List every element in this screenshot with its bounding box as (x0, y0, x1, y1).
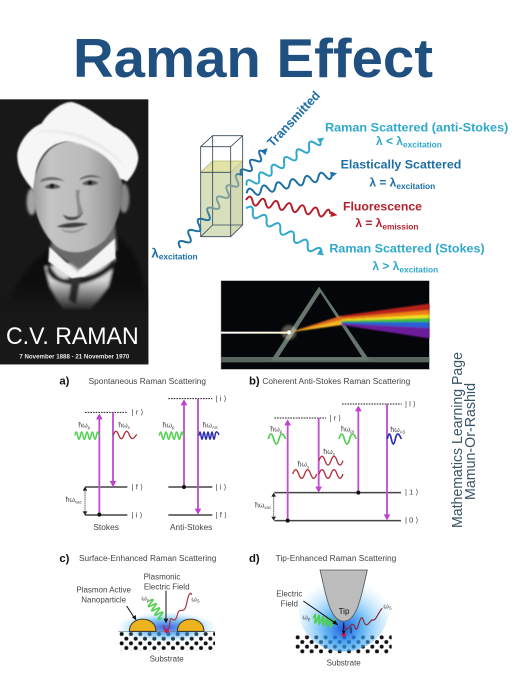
panel: prism photo (221, 281, 429, 369)
label: elastically scattered (341, 158, 461, 191)
white beam (221, 332, 289, 334)
label: anti-Stokes: excitation (403, 139, 442, 149)
anti-Stokes wave (245, 134, 326, 189)
name: C.V. RAMAN: C.V. RAMAN (6, 323, 139, 350)
labels c: Substrate (150, 654, 184, 663)
labels d: Tip (339, 607, 350, 616)
label: elastically scattered: λ = λ (369, 176, 396, 190)
labels c (76, 573, 190, 663)
panel c: surface-enhanced Raman scattering: S (197, 599, 200, 604)
incident wave (146, 599, 165, 620)
Stokes levels: | i ⟩ (132, 510, 143, 519)
Stokes levels: | r ⟩ (132, 408, 143, 417)
heading d: d) (249, 553, 260, 565)
substrate dots d (295, 635, 392, 654)
label: Stokes: Raman Scattered (Stokes) (329, 242, 485, 256)
label: transmitted: Transmitted (265, 88, 323, 150)
label: Stokes: λ > λ (372, 259, 399, 273)
energy levels b: | 0 ⟩ (405, 516, 418, 525)
arrows to labels (127, 591, 166, 619)
title: Raman Effect (73, 27, 433, 89)
labels c: Plasmonic (144, 573, 180, 582)
rainbow (289, 304, 429, 338)
subtitle c: Surface-Enhanced Raman Scattering (79, 554, 216, 563)
energy levels b: ħω (390, 427, 400, 434)
labels c: Nanoparticle (81, 596, 127, 605)
energy levels b: AS (400, 430, 406, 435)
subtitle a: Spontaneous Raman Scattering (89, 377, 206, 386)
panel d: tip-enhanced Raman scattering: ω (383, 603, 389, 610)
energy levels b: vac (264, 505, 272, 510)
energy levels b: p (280, 429, 283, 434)
dates: 7 November 1888 - 21 November 1970 (19, 353, 130, 360)
label: elastically scattered: Elastically Scattered (341, 158, 461, 172)
tip (320, 570, 367, 621)
heading c: c) (59, 553, 70, 565)
Stokes levels: Stokes (93, 523, 119, 532)
label: Stokes (329, 242, 485, 274)
label: excitation: excitation (159, 251, 198, 261)
nanoparticles (129, 619, 204, 631)
Stokes levels: | f ⟩ (132, 482, 143, 491)
labels d: Electric (276, 590, 302, 599)
subtitle d: Tip-Enhanced Raman Scattering (276, 554, 396, 563)
label: fluorescence (343, 200, 422, 231)
label: fluorescence: Fluorescence (343, 200, 422, 214)
labels c: Electric Field (144, 582, 190, 591)
watermark: page credit: Mathematics Learning Page (449, 352, 466, 528)
watermark: page credit: Mamun-Or-Rashid (462, 383, 479, 500)
heading b: b) (249, 376, 260, 388)
energy levels b: s (333, 452, 335, 457)
diagram: scattering from a sample cuvette (151, 88, 508, 274)
tip glow (299, 568, 389, 652)
energy levels b: pr (350, 429, 355, 434)
heading a: a) (59, 376, 70, 388)
Stokes levels: vac (75, 500, 83, 505)
anti-Stokes levels: Anti-Stokes (170, 523, 212, 532)
substrate dots (119, 632, 215, 651)
anti-Stokes levels: ħω (203, 422, 212, 429)
field arrows (303, 601, 351, 633)
label: Stokes: excitation (399, 264, 438, 274)
label: anti-Stokes: λ < λ (376, 134, 403, 148)
energy levels b: | r ⟩ (329, 413, 341, 422)
labels d (276, 590, 361, 667)
energy levels b: | 1 ⟩ (405, 487, 418, 496)
label: fluorescence: λ = λ (355, 216, 382, 230)
anti-Stokes levels: | i ⟩ (216, 482, 227, 491)
anti-Stokes levels: | i ⟩ (216, 394, 227, 403)
energy levels b: ħω (323, 449, 333, 456)
Stokes levels: ħω (66, 497, 75, 504)
energy levels b: ħω (270, 426, 280, 433)
elastic wave (246, 169, 338, 197)
fluorescence wave (245, 196, 338, 219)
plasmonic glow (117, 612, 217, 643)
label: anti-Stokes: Raman Scattered (anti-Stokes) (325, 120, 508, 134)
panel d: tip-enhanced Raman scattering: S (389, 606, 392, 611)
sample cuvette (201, 136, 243, 237)
prism triangle (271, 287, 370, 360)
Stokes levels (66, 408, 143, 532)
energy levels b: ħω (341, 426, 350, 433)
excitation wave (177, 172, 245, 250)
subtitle b: Coherent Anti-Stokes Raman Scattering (262, 377, 410, 386)
label: excitation: λ (151, 246, 159, 261)
energy levels b: ħω (298, 462, 307, 469)
Stokes wave (244, 205, 326, 259)
panel a: spontaneous Raman scattering (59, 376, 227, 532)
Stokes levels: s (128, 425, 130, 430)
anti-Stokes levels (159, 394, 227, 532)
label: elastically scattered: excitation (396, 181, 435, 191)
panel c: surface-enhanced Raman scattering: p (147, 598, 150, 603)
panel c: surface-enhanced Raman scattering: ω (191, 596, 197, 603)
labels d: Field (281, 599, 298, 608)
panel d: tip-enhanced Raman scattering (249, 553, 396, 667)
anti-Stokes levels: AS (212, 425, 218, 430)
anti-Stokes levels: | f ⟩ (216, 510, 227, 519)
energy levels b: s (307, 464, 309, 469)
watermark: page credit (449, 352, 479, 528)
transmitted wave (239, 145, 270, 178)
Stokes levels: p (88, 425, 91, 430)
Stokes levels: ħω (78, 422, 88, 429)
scattered wave d (344, 608, 382, 630)
panel: C.V. Raman portrait (0, 99, 148, 364)
anti-Stokes levels: p (172, 425, 175, 430)
energy levels b: | l ⟩ (405, 399, 416, 408)
panel b: coherent anti-Stokes Raman scattering (249, 376, 418, 525)
anti-Stokes levels: ħω (163, 422, 172, 429)
labels c: Plasmon Active (76, 586, 132, 595)
panel c: surface-enhanced Raman scattering: ω (141, 596, 147, 603)
panel d: tip-enhanced Raman scattering: ω (302, 614, 308, 621)
portrait photo illustration (0, 102, 148, 364)
panel c: surface-enhanced Raman scattering (59, 553, 217, 663)
energy levels b: ħω (255, 502, 264, 509)
label: anti-Stokes (325, 120, 508, 149)
Stokes levels: ħω (118, 422, 128, 429)
energy levels b (255, 399, 418, 525)
incident wave d (312, 614, 336, 628)
label: fluorescence: emission (382, 221, 418, 231)
panel d: tip-enhanced Raman scattering: p (308, 617, 311, 622)
labels d: Substrate (327, 658, 361, 667)
scattered wave (163, 593, 192, 631)
